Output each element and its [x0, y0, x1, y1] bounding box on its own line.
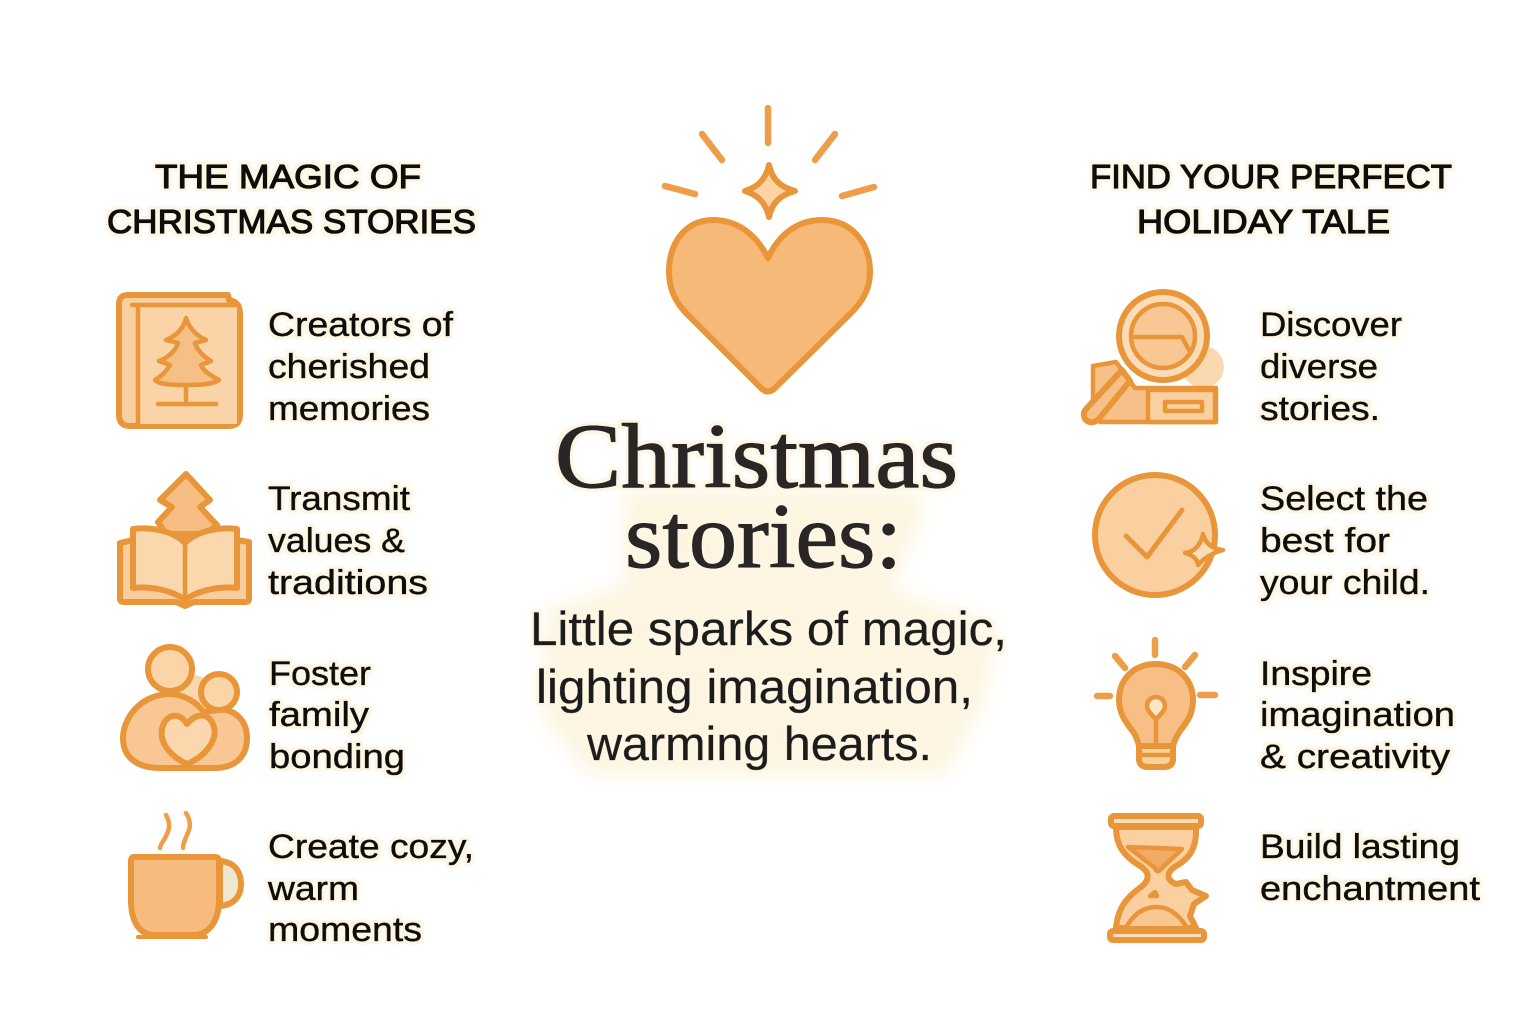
cream wash behind title [545, 490, 995, 775]
text: foster family bonding: Foster [269, 655, 371, 693]
subtitle: warming hearts. [586, 717, 932, 770]
text: inspire imagination and creativity: Inspire [1260, 655, 1372, 693]
panel: left column [107, 158, 476, 949]
icon: light bulb [1097, 640, 1215, 767]
heading: the magic of christmas stories [107, 158, 476, 240]
text: transmit values and traditions: Transmit [268, 480, 411, 518]
panel: center hero [530, 108, 1007, 775]
heading: find your perfect holiday tale: FIND YOUR PERFECT [1090, 158, 1452, 195]
text: discover diverse stories: diverse [1260, 348, 1378, 386]
text: create cozy warm moments [267, 828, 474, 949]
text: select the best for your child: your child. [1260, 564, 1430, 602]
text: discover diverse stories [1260, 306, 1402, 428]
text: creators of cherished memories: cherished [268, 348, 430, 386]
text: creators of cherished memories [268, 306, 454, 428]
text: inspire imagination and creativity: imagination [1260, 696, 1455, 734]
subtitle: lighting imagination, [536, 660, 973, 713]
icon: sparkle star [745, 165, 795, 217]
icon: heart [669, 220, 870, 392]
subtitle [530, 602, 1007, 770]
text: transmit values and traditions [268, 480, 428, 602]
text: select the best for your child: Select the [1260, 480, 1428, 518]
text: select the best for your child: best for [1260, 522, 1390, 560]
title [555, 405, 958, 587]
heading: the magic of christmas stories: CHRISTMAS STORIES [107, 203, 476, 240]
text: foster family bonding: family [269, 696, 369, 734]
text: create cozy warm moments: warm [267, 870, 359, 908]
icon: steaming mug [131, 813, 241, 937]
icon: check mark badge [1095, 475, 1223, 595]
text: foster family bonding [269, 655, 405, 776]
icon: hourglass [1110, 816, 1206, 940]
icon: open book with tree [120, 474, 249, 606]
icon: magnifier over books [1084, 292, 1224, 422]
heading: the magic of christmas stories: THE MAGIC OF [155, 158, 421, 195]
icon: storybook with tree [119, 295, 240, 426]
text: discover diverse stories: stories. [1260, 390, 1380, 428]
text: creators of cherished memories: memories [268, 390, 430, 428]
text: build lasting enchantment: Build lasting [1260, 828, 1460, 866]
text: create cozy warm moments: Create cozy, [268, 828, 474, 866]
text: transmit values and traditions: values & [268, 522, 405, 560]
text: build lasting enchantment [1260, 828, 1481, 908]
text: inspire imagination and creativity [1260, 655, 1455, 776]
text: discover diverse stories: Discover [1260, 306, 1402, 344]
icon: radiating rays [665, 108, 874, 196]
subtitle: Little sparks of magic, [530, 602, 1007, 655]
heading: find your perfect holiday tale [1090, 158, 1452, 240]
text: foster family bonding: bonding [269, 738, 405, 776]
icon: family hug with heart [123, 647, 247, 768]
heading: find your perfect holiday tale: HOLIDAY TALE [1137, 203, 1390, 240]
text: transmit values and traditions: traditions [268, 564, 428, 602]
text: build lasting enchantment: enchantment [1260, 870, 1481, 908]
text: creators of cherished memories: Creators of [268, 306, 454, 344]
text: select the best for your child [1260, 480, 1430, 602]
title: Christmas [555, 405, 958, 507]
text: create cozy warm moments: moments [268, 911, 422, 949]
title: stories: [625, 485, 902, 587]
text: inspire imagination and creativity: & creativity [1260, 738, 1450, 776]
panel: right column [1084, 158, 1481, 940]
